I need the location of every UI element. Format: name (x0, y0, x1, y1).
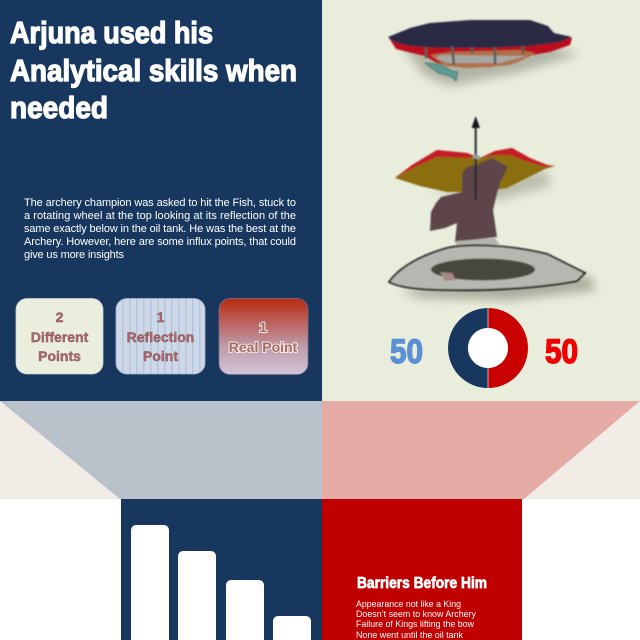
text block: intro paragraph (24, 197, 296, 261)
panel: right cream background (322, 0, 640, 401)
card: 2 different points: 2 (56, 309, 64, 325)
title (10, 15, 297, 125)
card: 1 reflection point: 1 (157, 309, 165, 325)
card: 1 reflection point: Point (143, 348, 178, 364)
text block: barriers list (356, 599, 476, 640)
oil tank (389, 245, 585, 290)
title: Arjuna used his (10, 15, 213, 50)
card: 2 different points: Different (31, 329, 89, 345)
stat: 50 blue: 50 (390, 333, 423, 371)
text block: intro paragraph: give us more insights (24, 249, 124, 261)
bar chart (131, 525, 311, 640)
bow (395, 148, 555, 192)
heading: barriers before him: Barriers Before Him (357, 575, 487, 592)
funnel band (0, 401, 640, 499)
stat: 50 red: 50 (545, 333, 578, 371)
arrow (475, 126, 477, 200)
text block: intro paragraph: The archery champion was asked to hit the Fish, stuck to (24, 197, 296, 209)
text block: intro paragraph: Archery. However, here are some influx points, that could (24, 236, 296, 248)
text block: barriers list: None went until the oil tank (356, 630, 463, 640)
card: 1 reflection point: Reflection (127, 329, 194, 345)
card: 2 different points (16, 298, 103, 374)
card: 1 real point: 1 (259, 319, 267, 335)
text block: barriers list: Failure of Kings lifting the bow (356, 619, 474, 629)
panel: red barriers panel (322, 499, 522, 640)
illustration: archer with bow over oil tank (389, 116, 596, 300)
text block: barriers list: Doesn’t seem to know Archery (356, 609, 476, 619)
illustration: boat and fish (388, 20, 580, 86)
card: 2 different points: Points (38, 348, 81, 364)
panel: left navy background (0, 0, 322, 401)
title: Analytical skills when (10, 53, 297, 88)
card: 1 real point (219, 298, 308, 374)
body (430, 158, 508, 242)
donut chart (448, 308, 528, 388)
text block: intro paragraph: a rotating wheel at the top looking at its reflection of the (24, 210, 296, 222)
panel: navy bar chart panel (121, 499, 322, 640)
card: 1 reflection point (116, 298, 205, 374)
text block: intro paragraph: same exactly below in the oil tank. He was the best at the (24, 223, 296, 235)
title: needed (10, 90, 108, 125)
card: 1 real point: Real Point (229, 339, 298, 355)
text block: barriers list: Appearance not like a King (356, 599, 461, 609)
